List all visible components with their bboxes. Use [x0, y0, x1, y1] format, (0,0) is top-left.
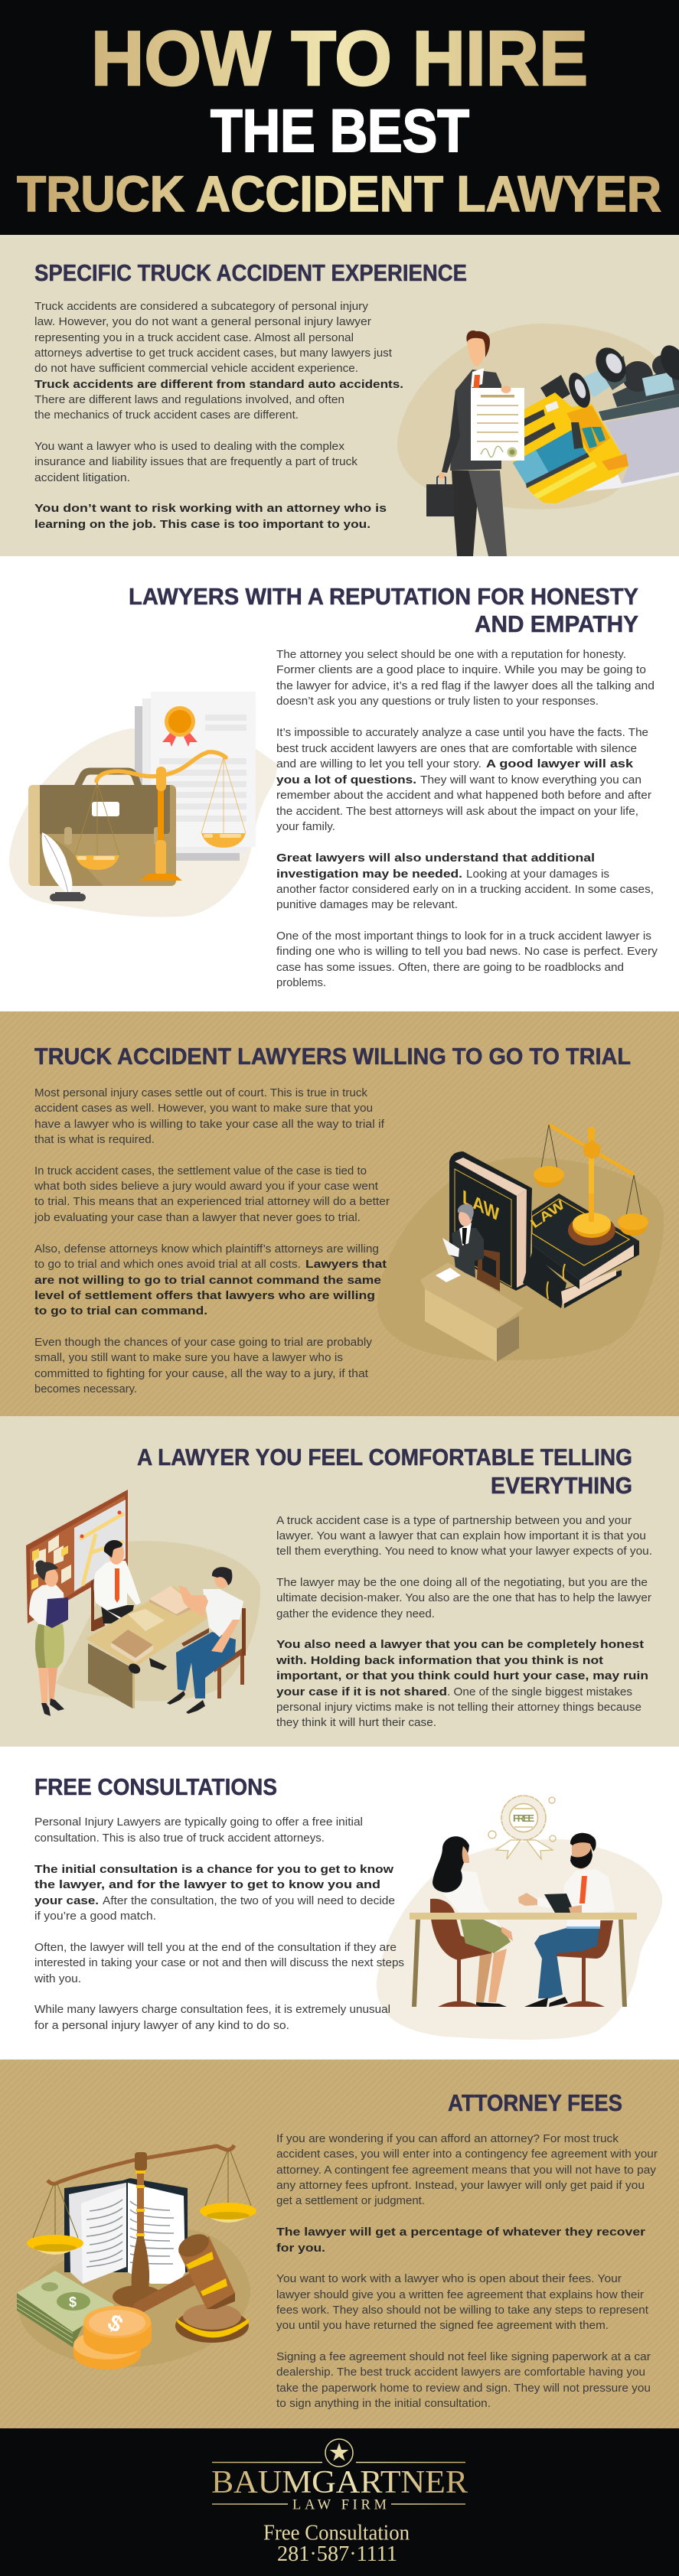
call to action: Free Consultation [263, 2522, 410, 2545]
text block: contingency fee: accident cases, you will enter into a contingency fee agreement with your [276, 2148, 658, 2161]
text block: intro: do not have sufficient commercial vehicle accident experience. [34, 363, 358, 375]
money stack [17, 2284, 83, 2347]
text block: settlement value [34, 1165, 390, 1224]
podium [420, 1262, 524, 1329]
text block: contingency fee: any attorney fees upfront. Instead, your lawyer will only get paid if you [276, 2180, 645, 2192]
text block: closing emphasis [34, 503, 387, 531]
text block: intro: Truck accidents are considered a subcategory of personal injury [34, 301, 369, 313]
scales of justice [96, 752, 226, 781]
text block: get to know [34, 1864, 395, 1923]
standing law book [449, 1151, 532, 1291]
text block: consultation fees [34, 2004, 390, 2032]
heading: SPECIFIC TRUCK ACCIDENT EXPERIENCE [34, 259, 467, 286]
text block: consultation fees: While many lawyers charge consultation fees, it is extremely unusual [34, 2004, 390, 2016]
text block: completely honest: your case if it is not shared [276, 1686, 447, 1698]
text block: completely honest: You also need a lawyer that you can be completely honest [276, 1639, 644, 1651]
text block: facts and questions: best truck accident lawyers are ones that are comfortable with silence [276, 743, 637, 755]
briefcase [77, 771, 139, 786]
text block: settle out of court [34, 1087, 385, 1146]
cork board [26, 1490, 128, 1623]
title line: truck accident lawyer: TRUCK ACCIDENT LAWYER [17, 165, 661, 222]
heading: EVERYTHING [491, 1472, 632, 1499]
text block: settle out of court: accident cases as well. However, you want to make sure that you [34, 1102, 373, 1115]
text block: additional investigation: another factor considered early on in a trucking accident. In some cases, [276, 884, 654, 896]
text block: open about fees [276, 2273, 648, 2332]
text block: complex issues: insurance and liability issues that are frequently a part of truck [34, 456, 358, 468]
text block: intro: the mechanics of truck accident cases are different. [34, 409, 299, 422]
text block: completely honest [276, 1639, 648, 1729]
certificate stack [135, 706, 240, 861]
text block: complex issues: accident litigation. [34, 472, 130, 484]
text block: reputation: doesn’t ask you any questions or truly listen to your responses. [276, 695, 599, 708]
text block: free initial consultation [34, 1816, 363, 1845]
truck cab [513, 392, 628, 503]
illustration: scales, book, gavel, money and coins: $ [69, 2294, 77, 2310]
text block: settle out of court: have a lawyer who is willing to take your case all the way to trial if [34, 1119, 385, 1131]
text block: facts and questions: your family. [276, 821, 335, 833]
top flat book [532, 1245, 579, 1289]
text block: percentage: The lawyer will get a percentage of whatever they recover [276, 2226, 645, 2239]
heading [129, 583, 638, 637]
text block: settlement value: job evaluating your case than a lawyer that never goes to trial. [34, 1212, 361, 1224]
title line: the best: THE BEST [211, 96, 469, 164]
heading: LAWYERS WITH A REPUTATION FOR HONESTY [129, 583, 638, 610]
text block: settlement value: to trial. This means that an experienced trial attorney will do a better [34, 1196, 390, 1208]
text block: bad news: finding one who is willing to tell you bad news. No case is perfect. Every [276, 946, 658, 958]
text block: intro [34, 301, 403, 422]
text block: intro: law. However, you do not want a general personal injury lawyer [34, 316, 371, 328]
scale of justice [549, 1125, 634, 1174]
text block: get to know: The initial consultation is a chance for you to get to know [34, 1864, 394, 1876]
text block: reputation [276, 649, 655, 708]
client seated [217, 1660, 221, 1698]
text block: intro: representing you in a truck accident case. Almost all personal [34, 332, 354, 344]
heading: A LAWYER YOU FEEL COMFORTABLE TELLING [137, 1444, 632, 1470]
attorney figure [477, 1249, 500, 1291]
heading [137, 1444, 632, 1499]
text block: chances of trial: small, you still want to make sure you have a lawyer who is [34, 1352, 343, 1364]
text block: defense attorneys: level of settlement offers that lawyers who are willing [34, 1290, 375, 1302]
text block: get to know: After the consultation, the two of you will need to decide [103, 1895, 395, 1907]
text block: complex issues: You want a lawyer who is used to dealing with the complex [34, 441, 345, 453]
text block: facts and questions: you a lot of questions. [276, 774, 416, 786]
text block: bad news: case has some issues. Often, there are going to be roadblocks and [276, 962, 624, 974]
text block: defense attorneys: Also, defense attorneys know which plaintiff’s attorneys are willing [34, 1243, 379, 1255]
gavel [132, 2272, 197, 2314]
panel: a lawyer you feel comfortable telling everything [0, 1416, 679, 1747]
text block: facts and questions: A good lawyer will ask [486, 758, 634, 770]
panel: specific truck accident experience [0, 235, 679, 556]
footer [0, 2428, 679, 2576]
text block: partnership: tell them everything. You need to know what your lawyer expects of you. [276, 1545, 652, 1558]
heading: ATTORNEY FEES [448, 2089, 622, 2116]
text block: closing emphasis: learning on the job. This case is too important to you. [34, 519, 371, 531]
text block: defense attorneys: to go to trial can command. [34, 1305, 207, 1317]
text block: bad news: problems. [276, 977, 326, 989]
man lawyer [563, 2001, 605, 2007]
logo: firm name: BAUMGARTNER [211, 2465, 468, 2500]
text block: decision maker [276, 1577, 651, 1620]
text block: intro: Truck accidents are different from standard auto accidents. [34, 379, 403, 391]
text block: partnership: A truck accident case is a type of partnership between you and your [276, 1515, 632, 1527]
text block: facts and questions: It’s impossible to accurately analyze a case until you have the facts. The [276, 727, 648, 739]
text block: settlement value: In truck accident cases, the settlement value of the case is tied to [34, 1165, 367, 1177]
illustration: law books, attorney, podium and scales [377, 1125, 664, 1362]
text block: open about fees: You want to work with a lawyer who is open about their fees. Your [276, 2273, 622, 2285]
text block: signing: take the paperwork home to review and sign. They will not pressure you [276, 2382, 651, 2395]
text block: intro: There are different laws and regulations involved, and often [34, 394, 344, 406]
text block: reputation: The attorney you select should be one with a reputation for honesty. [276, 649, 626, 661]
call to action: 281·587·1111 [277, 2542, 397, 2566]
text block: end of consultation: Often, the lawyer will tell you at the end of the consultation if they are [34, 1942, 397, 1954]
text block: decision maker: gather the evidence they need. [276, 1608, 435, 1620]
text block: reputation: the lawyer for advice, it’s a red flag if the lawyer does all the talking and [276, 680, 655, 692]
text block: percentage: for you. [276, 2242, 325, 2255]
text block: completely honest: . One of the single biggest mistakes [447, 1686, 632, 1698]
text block: facts and questions: remember about the accident and what happened both before and after [276, 790, 651, 802]
text block: contingency fee: get a settlement or judgment. [276, 2195, 425, 2207]
open book [64, 2178, 188, 2272]
text block: settle out of court: that is what is required. [34, 1134, 155, 1146]
text block: signing: Signing a fee agreement should not feel like signing paperwork at a car [276, 2351, 651, 2363]
lawyer head [467, 337, 486, 366]
text block: end of consultation [34, 1942, 404, 1985]
text block: bad news [276, 930, 658, 989]
text block: facts and questions: They will want to know everything you can [420, 774, 641, 786]
text block: settlement value: what both sides believe a jury would award you if your case went [34, 1181, 378, 1193]
illustration: law books, attorney, podium and scales: LAW [527, 1197, 568, 1231]
text block: open about fees: lawyer should give you a written fee agreement that explains how their [276, 2289, 644, 2301]
text block: defense attorneys: Lawyers that [305, 1259, 387, 1271]
text block: signing [276, 2351, 651, 2410]
text block: additional investigation: Looking at your damages is [466, 868, 609, 881]
text block: partnership [276, 1515, 652, 1558]
text block: reputation: Former clients are a good place to inquire. While you may be going to [276, 664, 646, 676]
text block: chances of trial [34, 1337, 373, 1395]
medal [162, 733, 176, 747]
FREE badge [488, 1796, 556, 1859]
illustration: scales, book, gavel, money and coins: $ [103, 2310, 127, 2338]
text block: completely honest: important, or that you think could hurt your case, may ruin [276, 1670, 648, 1682]
illustration: scales, book, gavel, money and coins [17, 2145, 256, 2369]
title line: how to hire: HOW TO HIRE [91, 16, 588, 102]
text block: decision maker: ultimate decision-maker. You also are the one that has to help the lawyer [276, 1592, 651, 1604]
coins [73, 2345, 141, 2369]
text block: contingency fee [276, 2133, 658, 2207]
text block: end of consultation: interested in taking your case or not and then will discuss the next steps [34, 1957, 404, 1969]
text block: contingency fee: attorney. A contingent fee agreement means that you will not have to pay [276, 2164, 657, 2177]
panel: reputation for honesty and empathy [0, 556, 679, 1011]
text block: completely honest: with. Holding back information that you think is not [276, 1655, 603, 1667]
text block: settle out of court: Most personal injury cases settle out of court. This is true in truck [34, 1087, 368, 1099]
text block: signing: dealership. The best truck accident lawyers are comfortable having you [276, 2366, 645, 2379]
truck wheels [565, 370, 594, 411]
table [86, 1586, 211, 1668]
panel: free consultations [0, 1747, 679, 2060]
heading: TRUCK ACCIDENT LAWYERS WILLING TO GO TO TRIAL [34, 1043, 631, 1070]
text block: consultation fees: for a personal injury lawyer of any kind to do so. [34, 2020, 289, 2032]
text block: chances of trial: becomes necessary. [34, 1383, 137, 1395]
text block: partnership: lawyer. You want a lawyer that can explain how important it is that you [276, 1530, 646, 1542]
text block: additional investigation: investigation may be needed. [276, 868, 462, 881]
illustration: briefcase, certificate and scales [9, 692, 277, 917]
panel: attorney fees [0, 2060, 679, 2428]
text block: free initial consultation: consultation. This is also true of truck accident attorneys. [34, 1832, 325, 1845]
text block: defense attorneys: to go to trial and which ones avoid trial at all costs. [34, 1259, 301, 1271]
call to action [263, 2522, 410, 2566]
text block: bad news: One of the most important things to look for in a truck accident lawyer is [276, 930, 651, 943]
text block: additional investigation: punitive damages may be relevant. [276, 899, 458, 911]
document [471, 388, 524, 461]
text block: decision maker: The lawyer may be the one doing all of the negotiating, but you are the [276, 1577, 648, 1589]
lawyer legs [452, 471, 477, 556]
text block: facts and questions [276, 727, 651, 833]
text block: open about fees: you until you have returned the signed fee agreement with them. [276, 2320, 609, 2332]
heading: FREE CONSULTATIONS [34, 1773, 277, 1800]
illustration: law books, attorney, podium and scales: LAW [462, 1185, 500, 1226]
text block: completely honest: personal injury victims make is not telling their attorney things because [276, 1702, 641, 1714]
scale of justice [47, 2145, 234, 2184]
logo: star emblem [325, 2439, 353, 2467]
bottom flat book [523, 1252, 566, 1308]
text block: additional investigation: Great lawyers will also understand that additional [276, 852, 595, 865]
text block: free initial consultation: Personal Injury Lawyers are typically going to offer a free initial [34, 1816, 363, 1829]
panel: lawyers willing to go to trial [0, 1011, 679, 1416]
truck chassis [612, 363, 679, 407]
text block: end of consultation: with you. [34, 1973, 81, 1985]
text block: defense attorneys [34, 1243, 387, 1317]
FREE badge: FREE [513, 1812, 534, 1824]
text block: complex issues [34, 441, 358, 484]
logo: law firm [212, 2462, 465, 2512]
lawyer suit [450, 370, 501, 471]
text block: closing emphasis: You don’t want to risk working with an attorney who is [34, 503, 387, 515]
truck trailer [599, 394, 679, 421]
text block: percentage [276, 2226, 645, 2255]
woman client [476, 1953, 492, 2002]
text block: chances of trial: Even though the chances of your case going to trial are probably [34, 1337, 373, 1349]
text block: contingency fee: If you are wondering if you can afford an attorney? For most truck [276, 2133, 619, 2145]
text block: additional investigation [276, 852, 654, 911]
text block: completely honest: they think it will hurt their case. [276, 1717, 436, 1729]
illustration: consultation at a table [377, 1796, 662, 2040]
briefcase [426, 484, 454, 516]
text block: get to know: the lawyer, and for the lawyer to get to know you and [34, 1879, 380, 1891]
text block: facts and questions: and are willing to let you tell your story. [276, 758, 482, 770]
text block: get to know: if you’re a good match. [34, 1910, 156, 1923]
logo: law firm: LAW FIRM [292, 2497, 387, 2512]
header banner [0, 0, 679, 235]
standing lawyer [91, 1581, 94, 1631]
woman with book [38, 1668, 48, 1706]
illustration: lawyer and overturned truck [397, 324, 679, 556]
text block: intro: attorneys advertise to get truck accident cases, but many lawyers just [34, 347, 392, 360]
table [410, 1913, 637, 1920]
quill and ink [42, 832, 72, 893]
illustration: office meeting [26, 1490, 260, 1716]
text block: get to know: your case. [34, 1895, 99, 1907]
heading: AND EMPATHY [475, 611, 638, 637]
text block: facts and questions: the accident. The best attorneys will ask about the impact on your life, [276, 806, 638, 818]
text block: open about fees: fees work. They also should not be willing to take any steps to represent [276, 2304, 648, 2317]
text block: signing: to sign anything in the initial consultation. [276, 2398, 491, 2410]
text block: defense attorneys: are not willing to go to trial cannot command the same [34, 1275, 381, 1287]
text block: chances of trial: committed to fighting for your cause, all the way to a jury, if that [34, 1368, 368, 1380]
